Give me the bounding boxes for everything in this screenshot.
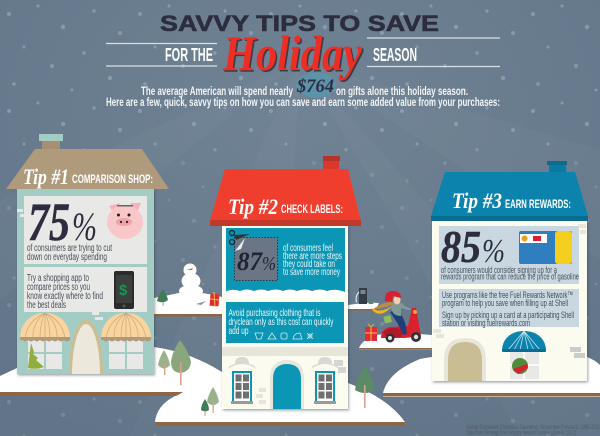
platform: snowman hill [154,264,222,316]
intro text: on gifts alone this holiday season. [336,86,468,98]
door [270,360,304,409]
roof [6,149,169,189]
intro text: The average American will spend nearly [141,86,293,98]
panel: 85 percent: 85 [441,221,481,272]
badge: offer [512,358,528,374]
title: Holiday [222,25,363,81]
tree [158,350,170,375]
panel: shopping app: Try a shopping app to [27,273,89,284]
heading: tip 1: COMPARISON SHOP: [72,172,153,186]
panel: dryclean: Avoid purchasing clothing that is [228,307,320,319]
panel: 87 percent: to save more money [283,267,340,278]
panel: fuel rewards: station or visiting fuelrewards.com [442,318,530,329]
heading: tip 2: Tip #2 [228,194,278,219]
heading: tip 1 [23,164,153,189]
title [106,11,500,82]
panel: shopping app: know exactly where to find [27,291,103,302]
panel: 87 percent: they could take on [283,259,335,270]
heading: tip 2: CHECK LABELS: [281,202,343,216]
coupon: 87 [237,247,263,276]
icon: phone: $ [119,282,128,299]
platform: right hill [383,354,600,397]
icon: rewards card [519,231,572,264]
roof [210,169,361,221]
footnote [466,425,600,436]
panel: 75 percent: of consumers are trying to cut [27,243,112,254]
panel: dryclean: add up [228,325,249,337]
house: tip 2 [210,156,361,409]
gift [365,324,377,341]
panel: dryclean [226,302,344,343]
panel: 87 percent: there are more steps [283,251,342,262]
window [510,350,539,379]
house: tip 1 [6,134,169,374]
icons: laundry symbols [255,333,313,339]
heading: tip 1: Tip #1 [23,164,69,189]
intro text [106,72,500,109]
platform: gas pump hill [348,288,379,310]
panel: 75 percent: % [72,204,97,249]
title: Holiday [224,26,364,82]
heading: tip 3 [452,188,571,213]
tree [207,387,219,413]
panel: 75 percent: down on everyday spending [27,252,107,263]
tree [355,365,375,408]
icon: christmas tree [28,343,44,369]
panel: fuel rewards [439,289,579,329]
windows [228,357,339,404]
tree [171,340,191,385]
panel: 87 percent [226,228,345,293]
panel: 85 percent: % [482,233,505,270]
title: SEASON [373,45,417,65]
snowman [179,264,203,297]
heading: tip 3: Tip #3 [452,188,502,213]
platform: scooter hill [359,291,432,350]
panel: 75 percent [24,192,147,264]
coupon [234,238,278,280]
badge: $764: $764 [296,76,334,97]
snow scallops [225,290,345,298]
panel: shopping app: the best deals [27,300,66,311]
tree [157,289,168,306]
coupon: % [262,253,276,275]
gift [209,292,220,307]
icon: scissors [230,230,250,251]
door [444,338,486,381]
scooter rider [372,291,421,342]
icon: gas pump [356,288,367,304]
panel: 75 percent: 75 [28,192,70,252]
heading: savvy tips to save: SAVVY TIPS TO SAVE [160,11,439,36]
house: tip 3 [431,161,588,381]
roof [431,172,588,216]
panel: 87 percent: of consumers feel [283,243,333,254]
awning [502,331,546,352]
door [69,320,103,374]
panel: 85 percent [439,221,579,284]
platform: main snow hill [0,340,405,426]
icon: piggy bank [107,203,143,239]
awnings and windows [20,313,151,369]
tree [201,399,209,416]
title: FOR THE [165,45,213,65]
panel: shopping app: compare prices so you [27,282,90,293]
heading: tip 2 [228,194,343,219]
panel: dryclean: dryclean only as this cost can quickly [228,316,334,328]
panel: shopping app [24,267,147,312]
